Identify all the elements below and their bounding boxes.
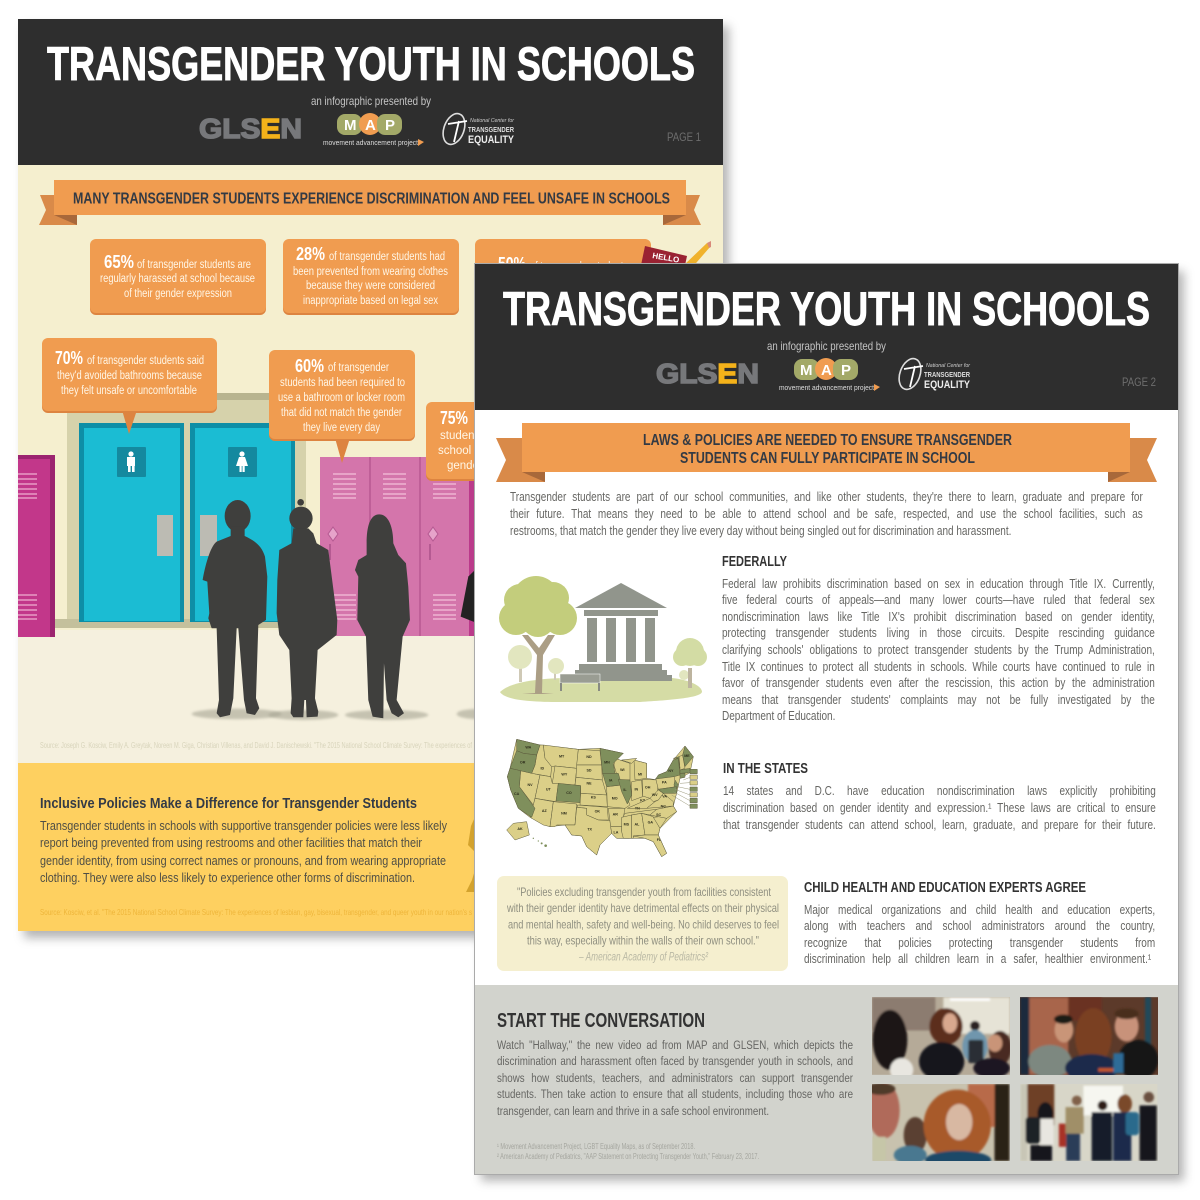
stat: 60% speech bubble: 60% [295,356,324,376]
stat: 28%: because they were considered [306,280,435,292]
start the conversation body: Watch "Hallway," the new video ad from MAP and GLSEN, which depicts the [497,1038,853,1052]
map: US states with nondiscrimination laws: ND [586,755,592,759]
right tree [673,638,707,688]
logo: NCTE: TRANSGENDER [924,370,970,379]
map: US states with nondiscrimination laws: ID [540,766,545,770]
in the states body: discrimination based on gender identity and expression.¹ These laws are critical to ensure [723,800,1156,814]
stat: 60% speech bubble: of transgender [328,362,389,374]
intro paragraph [510,488,1146,540]
stat: 60% speech bubble [269,350,415,463]
logo: NCTE: National Center for [470,118,514,124]
callout: AAP quote [497,876,788,971]
federally body: favor of transgender students even after the rescission, this action by the administration [722,676,1155,690]
stat: 75% speech bubble: gender [447,460,483,472]
start the conversation body: discrimination and harassment often faced by transgender youth in schools, and [497,1054,853,1068]
stat: 70% speech bubble [42,338,217,434]
logo: MAP: M [800,362,812,379]
inclusive policies body [40,819,448,885]
photo: girl with glasses [872,1084,1010,1161]
stat: 65%: of their gender expression [124,288,232,300]
map: US states with nondiscrimination laws: OH [645,786,651,790]
page 2 ribbon banner: LAWS & POLICIES ARE NEEDED TO ENSURE TRANSGENDER [643,432,1012,449]
logo: MAP: M [344,117,356,134]
map: US states with nondiscrimination laws: WY [561,773,568,777]
page 2 header [475,264,1178,410]
logo: MAP: P [385,117,395,134]
map: US states with nondiscrimination laws: IN [634,788,639,792]
logo: NCTE [439,111,515,147]
intro paragraph: their future. That means they need to be able to attend school and be safe, respected, and use the school facilities, such as [510,506,1143,520]
page 2 ribbon banner [496,423,1157,482]
stat: 70% speech bubble: of transgender students said [87,355,204,367]
silhouette at panel edge [466,817,475,892]
photo: two boys and girl [1020,997,1158,1075]
page 1 header [18,19,723,165]
stat: 28%: 28% [296,244,325,264]
in the states body [723,782,1159,834]
inclusive policies heading: Inclusive Policies Make a Difference for Transgender Students [40,795,417,812]
stat: 70% speech bubble: 70% [55,348,83,368]
footnotes: ² American Academy of Pediatrics, "AAP Statement on Protecting Transgender Youth," February 23, 2017. [497,1152,759,1161]
stat: 28%: of transgender students had [329,251,445,263]
stat: 28%: been prevented from wearing clothes [293,266,448,278]
panel: page 1 [18,19,729,938]
map: US states with nondiscrimination laws: NE [586,782,592,786]
map: US states with nondiscrimination laws: WA [525,745,532,749]
map: US states with nondiscrimination laws: IL [623,788,627,792]
panel: page 2 [474,264,1184,1181]
stat: 50%: of transgender students [530,261,628,273]
boys bathroom door [79,423,184,622]
map: US states with nondiscrimination laws: TN [635,807,640,811]
in the states body: that transgender students can attend school, learn, graduate, and prepare for their future. [723,818,1156,832]
page 1 title: TRANSGENDER YOUTH IN SCHOOLS [47,37,695,90]
girls bathroom door [190,423,295,622]
child health body: discrimination help all children learn in a safer, healthier environment.¹ [804,952,1151,966]
map: US states with nondiscrimination laws: AR [613,812,618,816]
page 1 ribbon banner: MANY TRANSGENDER STUDENTS EXPERIENCE DISCRIMINATION AND FEEL UNSAFE IN SCHOOLS [73,190,670,208]
stat: 70% speech bubble: they felt unsafe or uncomfortable [61,385,197,397]
federally body: means that transgender students' complaints may not be fully investigated by the [722,693,1155,707]
map: US states with nondiscrimination laws: CA [514,792,520,796]
footnotes [497,1142,759,1161]
wall and floor scene [18,393,723,763]
in the states body: 14 states and D.C. have education nondiscrimination laws explicitly prohibiting [723,784,1156,798]
map: US states with nondiscrimination laws: MO [612,796,618,800]
map: US states with nondiscrimination laws: AK [517,827,523,831]
logo: MAP: movement advancement project [323,140,418,147]
logo: MAP [323,113,424,147]
stat: 65%: 65% [104,252,134,272]
student one [203,500,267,717]
logo: NCTE: National Center for [926,363,970,369]
stat: 75% speech bubble: 75% [440,408,468,428]
logo: MAP: P [841,362,851,379]
map: US states with nondiscrimination laws: OR [520,760,526,764]
panel: start the conversation [475,985,1178,1174]
map: US states with nondiscrimination laws: WV [652,793,658,797]
federally body: five federal courts of appeals—and many lower courts—have ruled that federal sex [722,593,1155,607]
inclusive policies source: Source: Kosciw, et al. "The 2015 National School Climate Survey: The experiences of lesbian, gay, bisexual, transgender, and queer youth in our nation's s [40,907,472,917]
page 2 ribbon banner: STUDENTS CAN FULLY PARTICIPATE IN SCHOOL [680,450,975,467]
logo: MAP: A [365,117,376,134]
stat: 60% speech bubble: students had been required to [280,377,405,389]
stat: 70% speech bubble: they'd avoided bathrooms because [57,370,202,382]
logo: GLSEN: GLSEN [656,358,759,389]
inclusive policies body: clothing. They were also less likely to experience other forms of discrimination. [40,871,415,885]
federally heading: FEDERALLY [722,554,787,570]
large tree [499,576,577,694]
map: US states with nondiscrimination laws: LA [614,831,619,835]
logo: NCTE: EQUALITY [924,379,971,391]
building [570,583,672,681]
federally body: clarifying schools' obligations to protect transgender students by the Trump Administration, [722,643,1155,657]
federally body: Title IX continues to protect all students in schools. While courts have continued to rule in [722,660,1155,674]
small background trees [508,645,689,682]
map: US states with nondiscrimination laws: TX [587,827,593,831]
photo: three students talking [872,997,1010,1075]
pink lockers [320,457,475,636]
start the conversation body: transgender, can learn and thrive in a safe school environment. [497,1104,769,1118]
logo: NCTE: TRANSGENDER [468,125,514,134]
stat: 75% speech bubble: students [440,430,484,442]
left locker [18,455,55,637]
student two [277,499,337,717]
child health body: Major medical organizations and child health and education experts, [804,903,1155,917]
map: US states with nondiscrimination laws: FL [657,838,662,842]
stat: 65% [90,239,266,315]
map: US states with nondiscrimination laws: NM [561,812,567,816]
map: US states with nondiscrimination laws: MI [638,773,642,777]
icon: hello name tag and pencil [640,241,711,270]
footnotes: ¹ Movement Advancement Project, LGBT Equality Maps, as of September 2018. [497,1142,695,1151]
page 1 presented by: an infographic presented by [311,94,431,108]
map: US states with nondiscrimination laws: UT [546,787,552,791]
stat: 75% speech bubble: school because [438,445,518,457]
bathroom door frame [55,393,315,628]
federally body: Department of Education. [722,709,835,723]
map: US states with nondiscrimination laws: SC [656,813,662,817]
intro paragraph: restrooms, that match the gender they live every day without being singled out for discrimination and harassment. [510,524,1011,538]
map: US states with nondiscrimination laws: WI [620,768,625,772]
callout: AAP quote: this way, especially within the walls of their own school." [527,934,759,948]
map: US states with nondiscrimination laws: MS [624,823,630,827]
map: US states with nondiscrimination laws: OK [595,810,600,814]
federally body: Federal law prohibits discrimination based on sex in education through Title IX. Currently, [722,577,1155,591]
federally body: protecting transgender students living in those circuits. Despite rescinding guidance [722,626,1155,640]
page 1 source: Source: Joseph G. Kosciw, Emily A. Greytak, Noreen M. Giga, Christian Villenas, and David J. Danischewski. "The 2015 National School Climate Survey: The experiences of [40,740,472,750]
bench [560,674,600,691]
start the conversation body [497,1037,856,1121]
panel: inclusive policies [18,763,723,931]
map: US states with nondiscrimination laws: ME [684,754,690,758]
icon: female restroom sign [236,451,248,472]
illustration: courthouse in park [499,576,707,702]
page 1 ribbon banner [39,180,701,225]
child health body: along with teachers and school administrators around the country, [804,919,1155,933]
start the conversation heading: START THE CONVERSATION [497,1010,705,1032]
stat: 60% speech bubble: use a bathroom or locker room [278,392,405,404]
federally body [722,576,1158,728]
stat: 60% speech bubble: they live every day [303,422,380,434]
inclusive policies body: report being prevented from using restrooms and other facilities that match their [40,836,422,850]
callout: AAP quote: with their gender identity have detrimental effects on their physical [506,901,779,915]
logo: MAP: A [821,362,832,379]
logo: NCTE [895,356,971,392]
logo: NCTE: EQUALITY [468,134,515,146]
child health body [804,902,1158,970]
page 1 number: PAGE 1 [667,130,701,144]
inclusive policies body: Transgender students in schools with supportive transgender policies were less likely [40,819,448,833]
map: US states with nondiscrimination laws: NY [668,769,674,773]
callout: AAP quote: – American Academy of Pediatrics² [578,950,709,964]
inclusive policies body: gender identity, from using correct names or pronouns, and from wearing appropriate [40,854,446,868]
start the conversation body: shows how students, teachers, and administrators can support transgender [497,1071,853,1085]
stat: 50% [475,239,651,313]
map: US states with nondiscrimination laws: MN [604,761,610,765]
stat: 28% [283,239,459,315]
logo: GLSEN: GLSEN [199,113,302,144]
map: US states with nondiscrimination laws: SD [586,768,592,772]
stat: 65%: of transgender students are [137,259,251,271]
stat: 50%: 50% [498,254,526,274]
map: US states with nondiscrimination laws: PA [662,780,667,784]
start the conversation body: students. Then take action to ensure that all students, including those who are [497,1087,853,1101]
map: US states with nondiscrimination laws: AZ [542,809,548,813]
map: US states with nondiscrimination laws: AL [635,822,640,826]
child health heading: CHILD HEALTH AND EDUCATION EXPERTS AGREE [804,880,1086,896]
stat: 28%: inappropriate based on legal sex [303,295,438,307]
map: US states with nondiscrimination laws: MT [559,755,565,759]
federally body: nondiscrimination laws like Title IX's prohibit discrimination based on gender identity, [722,610,1155,624]
map: US states with nondiscrimination laws: VA [662,795,667,799]
logo: MAP: movement advancement project [779,385,874,392]
map: US states with nondiscrimination laws: GA [648,820,653,824]
page 2 presented by: an infographic presented by [767,339,886,353]
map: US states with nondiscrimination laws: IA [609,779,613,783]
map: US states with nondiscrimination laws: KS [591,795,596,799]
student silhouettes [192,499,497,720]
map: US states with nondiscrimination laws [507,739,697,857]
logo: MAP [779,358,880,392]
stat: 65%: regularly harassed at school because [100,273,255,285]
photo: students and teachers in hallway [1020,1084,1158,1161]
icon: male restroom sign [127,451,135,472]
stat: 75% speech bubble [426,402,586,481]
map: US states with nondiscrimination laws: NV [527,783,533,787]
intro paragraph: Transgender students are part of our school communities, and like other students, they're there to learn, graduate and prepare for [510,490,1143,504]
icon: hello name tag and pencil: HELLO [652,251,680,265]
callout: AAP quote: "Policies excluding transgender youth from facilities consistent [517,885,772,899]
student three [355,514,410,718]
student four [461,565,480,623]
child health body: recognize that policies protecting transgender students from [804,936,1155,950]
callout: AAP quote: and mental health, safety and well-being. No child deserves to feel [508,918,779,932]
map: US states with nondiscrimination laws: CO [566,791,572,795]
stat: 60% speech bubble: that did not match the gender [281,407,402,419]
map: US states with nondiscrimination laws: KY [640,798,646,802]
map: US states with nondiscrimination laws: NC [661,804,666,808]
page 2 number: PAGE 2 [1122,375,1156,389]
in the states heading: IN THE STATES [723,761,808,777]
